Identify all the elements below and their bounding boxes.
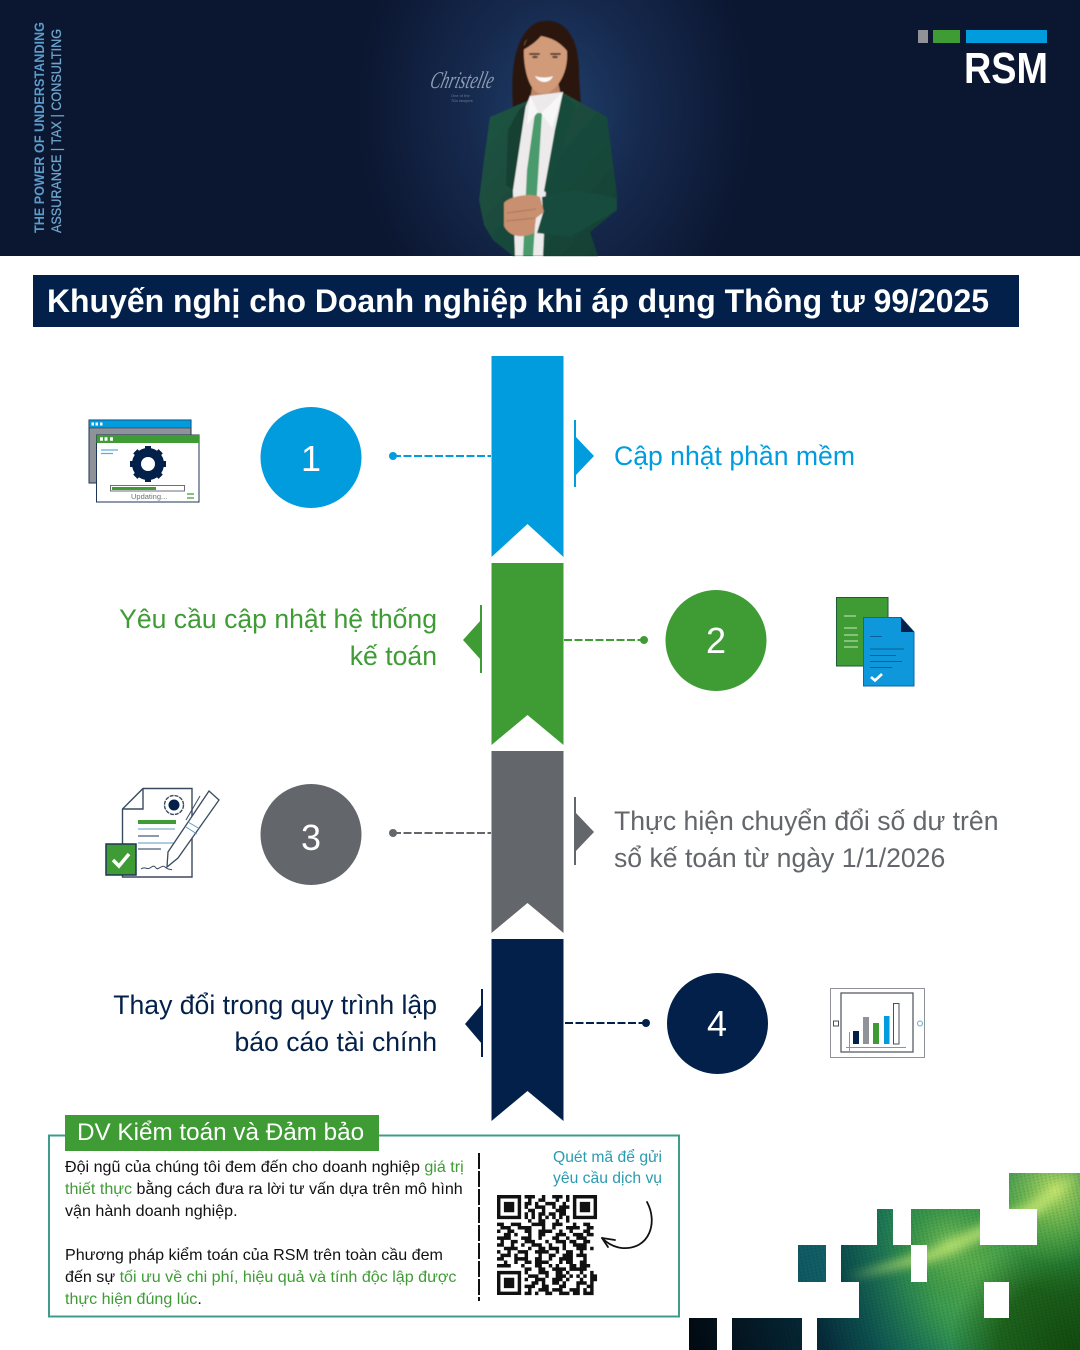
signature: Christelle [428, 67, 497, 94]
step 4 text: báo cáo tài chính [234, 1027, 437, 1057]
step 2 text: kế toán [350, 641, 437, 671]
portrait photo [479, 21, 617, 256]
panel body text: Phương pháp kiểm toán của RSM trên toàn cầu đem [65, 1246, 443, 1264]
panel body text: thực hiện đúng lúc. [65, 1290, 202, 1308]
panel heading: DV Kiểm toán và Đảm bảo [77, 1119, 364, 1146]
panel border [49, 1136, 679, 1316]
panel body text: đến sự tối ưu về chi phí, hiệu quả và tính độc lập được [65, 1268, 456, 1286]
QR caption: Quét mã để gửi [553, 1148, 662, 1166]
number badge 2 [666, 590, 766, 691]
QR caption: yêu cầu dịch vụ [553, 1170, 662, 1187]
connector 4 [565, 1019, 650, 1027]
step 3 [106, 751, 998, 933]
pointer 3 [575, 797, 594, 865]
step 3 text: Thực hiện chuyển đổi số dư trên [614, 806, 998, 836]
step 2 text: Yêu cầu cập nhật hệ thống [119, 604, 437, 634]
step 1 [89, 356, 855, 557]
banner [0, 0, 1080, 256]
step 3 text [614, 806, 998, 873]
number badge 2: 2 [706, 620, 726, 661]
panel heading [65, 1115, 379, 1151]
connector 3 [389, 829, 491, 837]
step 2 text [119, 604, 437, 671]
number badge 4: 4 [707, 1003, 727, 1044]
RSM logo [918, 30, 1048, 93]
icon: software update: Updating... [131, 492, 167, 501]
ribbon: green [492, 563, 564, 745]
connector 2 [564, 636, 648, 644]
vertical tagline [31, 22, 64, 233]
QR caption [553, 1148, 662, 1187]
number badge 1: 1 [301, 438, 321, 479]
signature [428, 67, 497, 103]
ribbon: navy [492, 939, 564, 1121]
ribbon: gray [492, 751, 564, 933]
arrow to QR code [602, 1202, 652, 1248]
panel: audit service [49, 1115, 679, 1316]
panel body text: vận hành doanh nghiệp. [65, 1202, 238, 1220]
title: Khuyến nghị cho Doanh nghiệp khi áp dụng Thông tư 99/2025 [47, 283, 989, 319]
number badge 3 [260, 784, 362, 885]
step 3 text: sổ kế toán từ ngày 1/1/2026 [614, 843, 945, 873]
signature: 7Ds lawyers [451, 98, 473, 103]
pointer 4 [465, 989, 482, 1057]
pointer 1 [575, 420, 594, 487]
panel body text: Đội ngũ của chúng tôi đem đến cho doanh nghiệp giá trị [65, 1158, 464, 1176]
corner image: green mesh [680, 1160, 1080, 1350]
icon: signed document [106, 788, 219, 877]
pointer 2 [463, 605, 481, 673]
vertical tagline: ASSURANCE | TAX | CONSULTING [48, 29, 64, 233]
banner background [0, 0, 1080, 256]
step 4 text [113, 990, 437, 1057]
number badge 1 [260, 407, 362, 508]
panel body text: thiết thực bằng cách đưa ra lời tư vấn dựa trên mô hình [65, 1179, 463, 1198]
icon: documents [836, 598, 914, 686]
RSM logo: RSM [964, 44, 1048, 93]
number badge 4 [667, 973, 768, 1074]
title [33, 275, 1019, 327]
step 2 [119, 563, 914, 745]
panel body text [65, 1158, 464, 1308]
number badge 3: 3 [301, 817, 321, 858]
connector 1 [389, 452, 491, 460]
QR code [497, 1195, 597, 1295]
step 4 [113, 939, 924, 1121]
vertical tagline: THE POWER OF UNDERSTANDING [31, 22, 47, 233]
signature: One of the [451, 93, 470, 98]
step 1 text: Cập nhật phần mềm [614, 441, 855, 471]
icon: software update [89, 420, 199, 502]
ribbon: blue [492, 356, 564, 557]
icon: tablet chart [830, 988, 924, 1058]
step 4 text: Thay đổi trong quy trình lập [113, 990, 437, 1020]
